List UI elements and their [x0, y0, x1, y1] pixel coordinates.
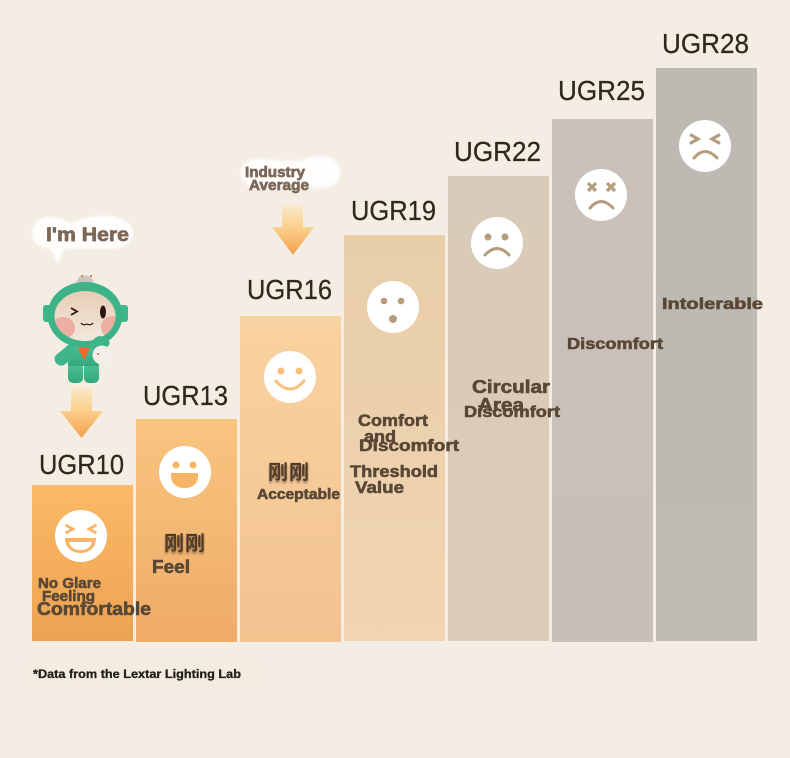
speech bubble	[32, 216, 133, 264]
mascot: green astronaut	[43, 275, 128, 383]
column: UGR22	[448, 136, 561, 641]
heading UGR22: UGR22	[454, 136, 541, 167]
bar UGR28	[656, 68, 757, 641]
heading UGR28: UGR28	[662, 28, 749, 59]
label: Comfort and Discomfort: Discomfort	[359, 436, 459, 455]
chest badge	[78, 348, 90, 360]
label: Threshold Value	[350, 462, 438, 497]
label: Circular Area	[472, 377, 550, 415]
bar UGR19	[344, 235, 445, 641]
label: Comfort and Discomfort	[358, 411, 459, 455]
cloud bubble	[241, 156, 341, 189]
label: Comfort and Discomfort: and	[364, 427, 396, 446]
legs	[68, 362, 83, 383]
bar UGR10	[32, 485, 133, 641]
column: UGR28	[656, 28, 763, 641]
icon: big smile face	[159, 446, 211, 498]
cloud text	[245, 165, 309, 194]
arrow: pointing to UGR10	[60, 387, 103, 438]
face	[54, 291, 116, 341]
label: Threshold Value: Threshold	[350, 462, 438, 481]
column: UGR10	[32, 449, 151, 641]
label: No Glare Feeling	[38, 575, 101, 605]
footnote text: *Data from the Lextar Lighting Lab	[33, 669, 241, 681]
icon: dizzy face	[575, 169, 627, 221]
heading UGR13: UGR13	[143, 380, 228, 411]
helmet	[48, 282, 122, 348]
footnote	[28, 660, 260, 687]
callout: I'm Here	[32, 216, 133, 264]
bar UGR13	[136, 419, 237, 642]
cheeks	[54, 316, 116, 338]
mouth	[81, 323, 93, 325]
footnote backdrop	[28, 660, 260, 687]
column: UGR25	[552, 75, 664, 642]
left arm	[54, 342, 76, 366]
label: Acceptable: Acceptable	[257, 487, 340, 503]
label: Comfortable: Comfortable	[37, 599, 151, 619]
arrow: pointing to UGR16	[272, 205, 314, 255]
bar UGR22	[448, 176, 549, 641]
label: Chinese characters: 刚刚	[164, 532, 205, 555]
column: UGR13	[136, 380, 237, 642]
label: Comfort and Discomfort: Comfort	[358, 411, 428, 430]
label: Discomfort: Discomfort	[567, 336, 664, 353]
heading UGR10: UGR10	[39, 449, 124, 480]
label: Circular Area: Circular	[472, 377, 550, 397]
label: Threshold Value: Value	[355, 478, 404, 497]
icon: surprised face	[367, 281, 419, 333]
label: No Glare Feeling: No Glare	[38, 575, 101, 592]
icon: sad face	[471, 217, 523, 269]
label: Chinese characters: 刚刚	[268, 461, 309, 484]
helmet top cap	[75, 276, 95, 284]
label: Discomfort: Discomfort	[464, 404, 561, 421]
bar UGR16	[240, 316, 341, 642]
eyes	[71, 308, 77, 315]
heading UGR19: UGR19	[351, 195, 436, 226]
label: Intolerable: Intolerable	[662, 296, 763, 313]
label: Circular Area: Area	[478, 395, 525, 415]
helmet ears	[43, 305, 52, 322]
held white ball	[92, 346, 112, 364]
label: Feel: Feel	[152, 557, 190, 577]
callout: Industry Average	[241, 156, 341, 194]
infographic: UGR glare levels	[32, 34, 763, 681]
icon: smile face	[264, 351, 316, 403]
cloud text: Average	[249, 178, 309, 194]
column: UGR16	[240, 274, 341, 642]
bar UGR25	[552, 119, 653, 642]
heading UGR25: UGR25	[558, 75, 645, 106]
bubble text: I'm Here	[46, 225, 129, 246]
icon: squinting sad face	[679, 120, 731, 172]
label: No Glare Feeling: Feeling	[42, 588, 95, 605]
body	[68, 342, 99, 366]
column: UGR19	[344, 195, 459, 641]
cloud text: Industry	[245, 165, 305, 181]
raised hand	[91, 336, 110, 348]
icon: laughing face	[55, 510, 107, 562]
heading UGR16: UGR16	[247, 274, 332, 305]
